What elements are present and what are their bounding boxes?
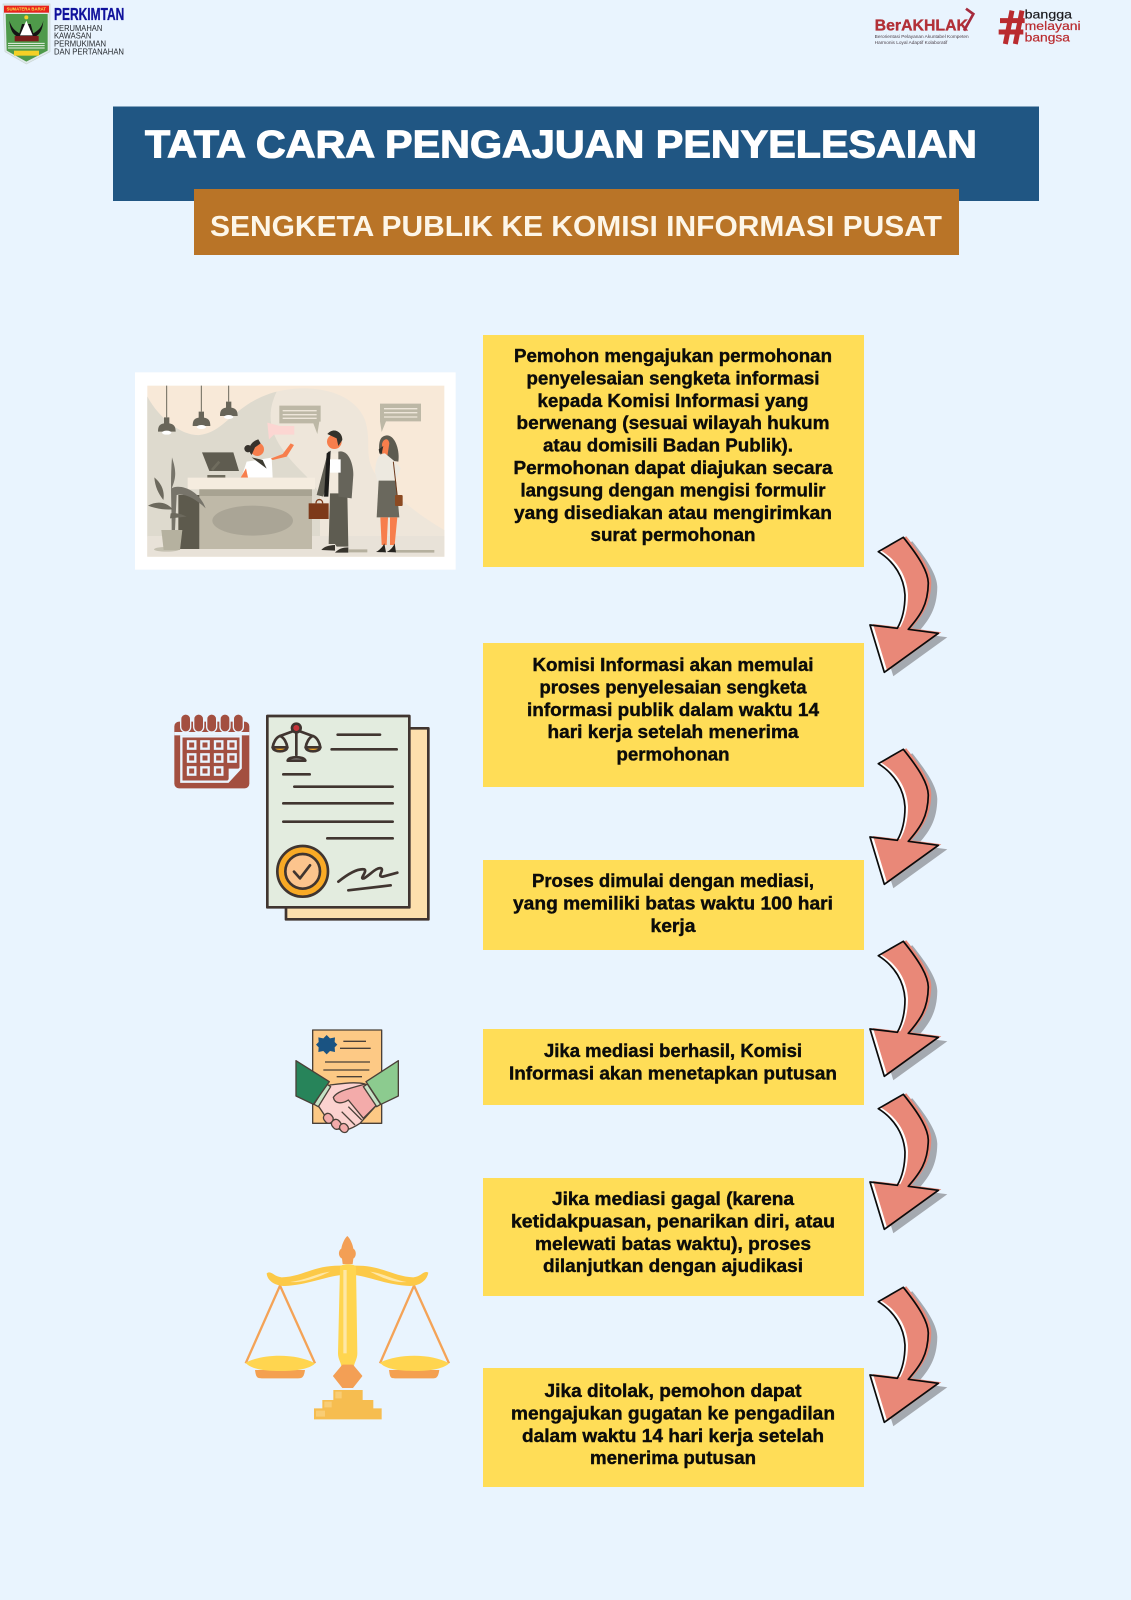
step 2 box: hari kerja setelah menerima: [548, 722, 800, 742]
step 1 box: Pemohon mengajukan permohonan: [514, 346, 832, 366]
step 5 box: ketidakpuasan, penarikan diri, atau: [511, 1211, 835, 1231]
step 5 box: dilanjutkan dengan ajudikasi: [543, 1256, 803, 1276]
step 3 box: [483, 860, 864, 950]
step 5 box: [483, 1178, 864, 1296]
step 2 box: informasi publik dalam waktu 14: [527, 700, 819, 720]
title banner: [113, 106, 1039, 201]
step 4 box: Informasi akan menetapkan putusan: [509, 1063, 837, 1083]
step 6 box: mengajukan gugatan ke pengadilan: [511, 1403, 835, 1423]
step 1 box: penyelesaian sengketa informasi: [526, 368, 820, 388]
step 6 box: [483, 1368, 864, 1487]
step 1 box: berwenang (sesuai wilayah hukum: [516, 413, 830, 433]
step 5 box: melewati batas waktu), proses: [535, 1234, 811, 1254]
logo: Perkimtan: DAN PERTANAHAN: [54, 47, 124, 56]
title banner: TATA CARA PENGAJUAN PENYELESAIAN: [145, 124, 977, 166]
step 1 box: langsung dengan mengisi formulir: [520, 480, 826, 500]
logo: BerAKHLAK: [875, 9, 973, 45]
logo: bangga melayani bangsa: bangga: [1025, 8, 1072, 22]
step 1 box: surat permohonan: [590, 525, 756, 545]
step 2 box: proses penyelesaian sengketa: [540, 677, 808, 697]
arrow: step 1 to 2: [870, 536, 947, 676]
logo: BerAKHLAK: Berorientasi Pelayanan Akuntabel Kompeten: [875, 34, 969, 39]
step 4 box: [483, 1029, 864, 1105]
logo: bangga melayani bangsa: [999, 8, 1081, 45]
step 3 box: Proses dimulai dengan mediasi,: [532, 871, 814, 891]
step 3 box: kerja: [650, 916, 697, 936]
logo: Perkimtan: KAWASAN: [54, 32, 92, 41]
step 1 box: yang disediakan atau mengirimkan: [514, 503, 832, 523]
step 2 box: permohonan: [616, 745, 730, 765]
step 6 box: Jika ditolak, pemohon dapat: [544, 1381, 802, 1401]
icon: legal document with seal: [267, 716, 428, 919]
logo: Perkimtan: SUMATERA BARAT: [7, 7, 46, 13]
step 6 box: menerima putusan: [590, 1448, 756, 1468]
arrow: step 5 to 6: [870, 1286, 947, 1426]
step 2 box: [483, 643, 864, 787]
step 4 box: Jika mediasi berhasil, Komisi: [544, 1041, 802, 1061]
subtitle banner: [194, 189, 959, 255]
subtitle banner: SENGKETA PUBLIK KE KOMISI INFORMASI PUSAT: [210, 211, 942, 243]
icon: handshake agreement: [296, 1030, 398, 1134]
logo: bangga melayani bangsa: bangsa: [1025, 31, 1070, 45]
step 5 box: Jika mediasi gagal (karena: [552, 1189, 795, 1209]
step 2 box: Komisi Informasi akan memulai: [532, 655, 814, 675]
step 6 box: dalam waktu 14 hari kerja setelah: [522, 1426, 824, 1446]
logo: BerAKHLAK: BerAKHLAK: [875, 18, 969, 35]
step 1 box: atau domisili Badan Publik).: [543, 436, 793, 456]
step 3 box: yang memiliki batas waktu 100 hari: [513, 893, 833, 913]
arrow: step 2 to 3: [870, 748, 947, 888]
logo: Perkimtan: PERKIMTAN: [54, 4, 124, 24]
icon: calendar: [174, 714, 249, 788]
step 1 box: Permohonan dapat diajukan secara: [514, 458, 834, 478]
arrow: step 3 to 4: [870, 940, 947, 1080]
logo: Perkimtan: PERUMAHAN: [54, 24, 103, 33]
logo: Perkimtan: PERMUKIMAN: [54, 40, 106, 49]
arrow: step 4 to 5: [870, 1093, 947, 1233]
icon: golden scales of justice: [246, 1236, 449, 1419]
step 1 box: kepada Komisi Informasi yang: [538, 391, 808, 411]
logo: BerAKHLAK: Harmonis Loyal Adaptif Kolaboratif: [875, 40, 948, 45]
illustration: reception office scene: [135, 372, 456, 570]
logo: Perkimtan: [3, 4, 124, 64]
step 1 box: [483, 335, 864, 567]
logo: bangga melayani bangsa: melayani: [1025, 19, 1081, 33]
